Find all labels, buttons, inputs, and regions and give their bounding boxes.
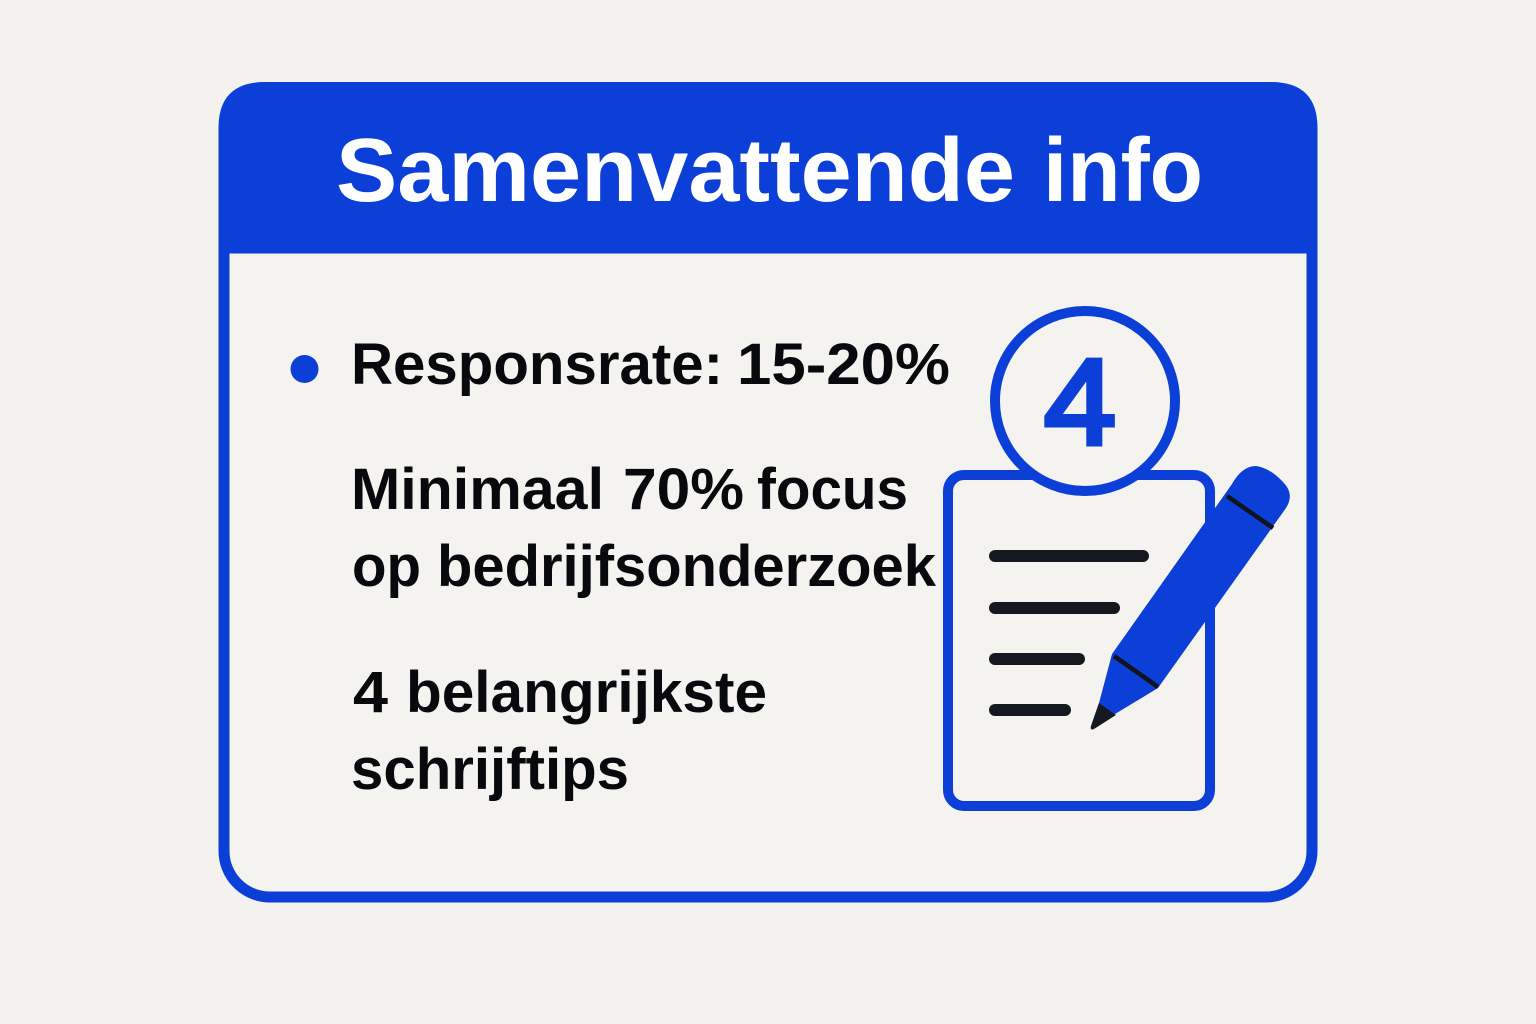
number circle <box>995 311 1175 491</box>
header band <box>218 82 1318 254</box>
text: writing tips: 4 <box>353 660 388 725</box>
text: focus: bedrijfsonderzoek <box>437 534 937 599</box>
bullet dot <box>290 355 318 383</box>
text: focus: 70% <box>623 457 744 522</box>
pencil <box>1091 466 1290 730</box>
text: response rate: 15-20% <box>737 332 950 397</box>
text: response rate: Responsrate: <box>351 332 723 397</box>
text: writing tips: belangrijkste <box>406 660 767 725</box>
title: Samenvattende <box>336 121 1015 221</box>
text: writing tips <box>351 660 767 802</box>
document lines <box>995 556 1143 710</box>
text: focus: op <box>352 534 421 599</box>
document <box>948 475 1210 806</box>
card frame <box>224 88 1312 897</box>
icon: checklist with pencil <box>948 311 1290 806</box>
text: focus: focus <box>757 457 908 522</box>
text: response rate <box>351 332 950 397</box>
number four: 4 <box>1044 334 1116 470</box>
text: writing tips: schrijftips <box>351 737 629 802</box>
text: focus: Minimaal <box>351 457 604 522</box>
title: info <box>1043 121 1203 221</box>
text: focus <box>351 457 937 599</box>
panel: summary card <box>218 82 1318 897</box>
